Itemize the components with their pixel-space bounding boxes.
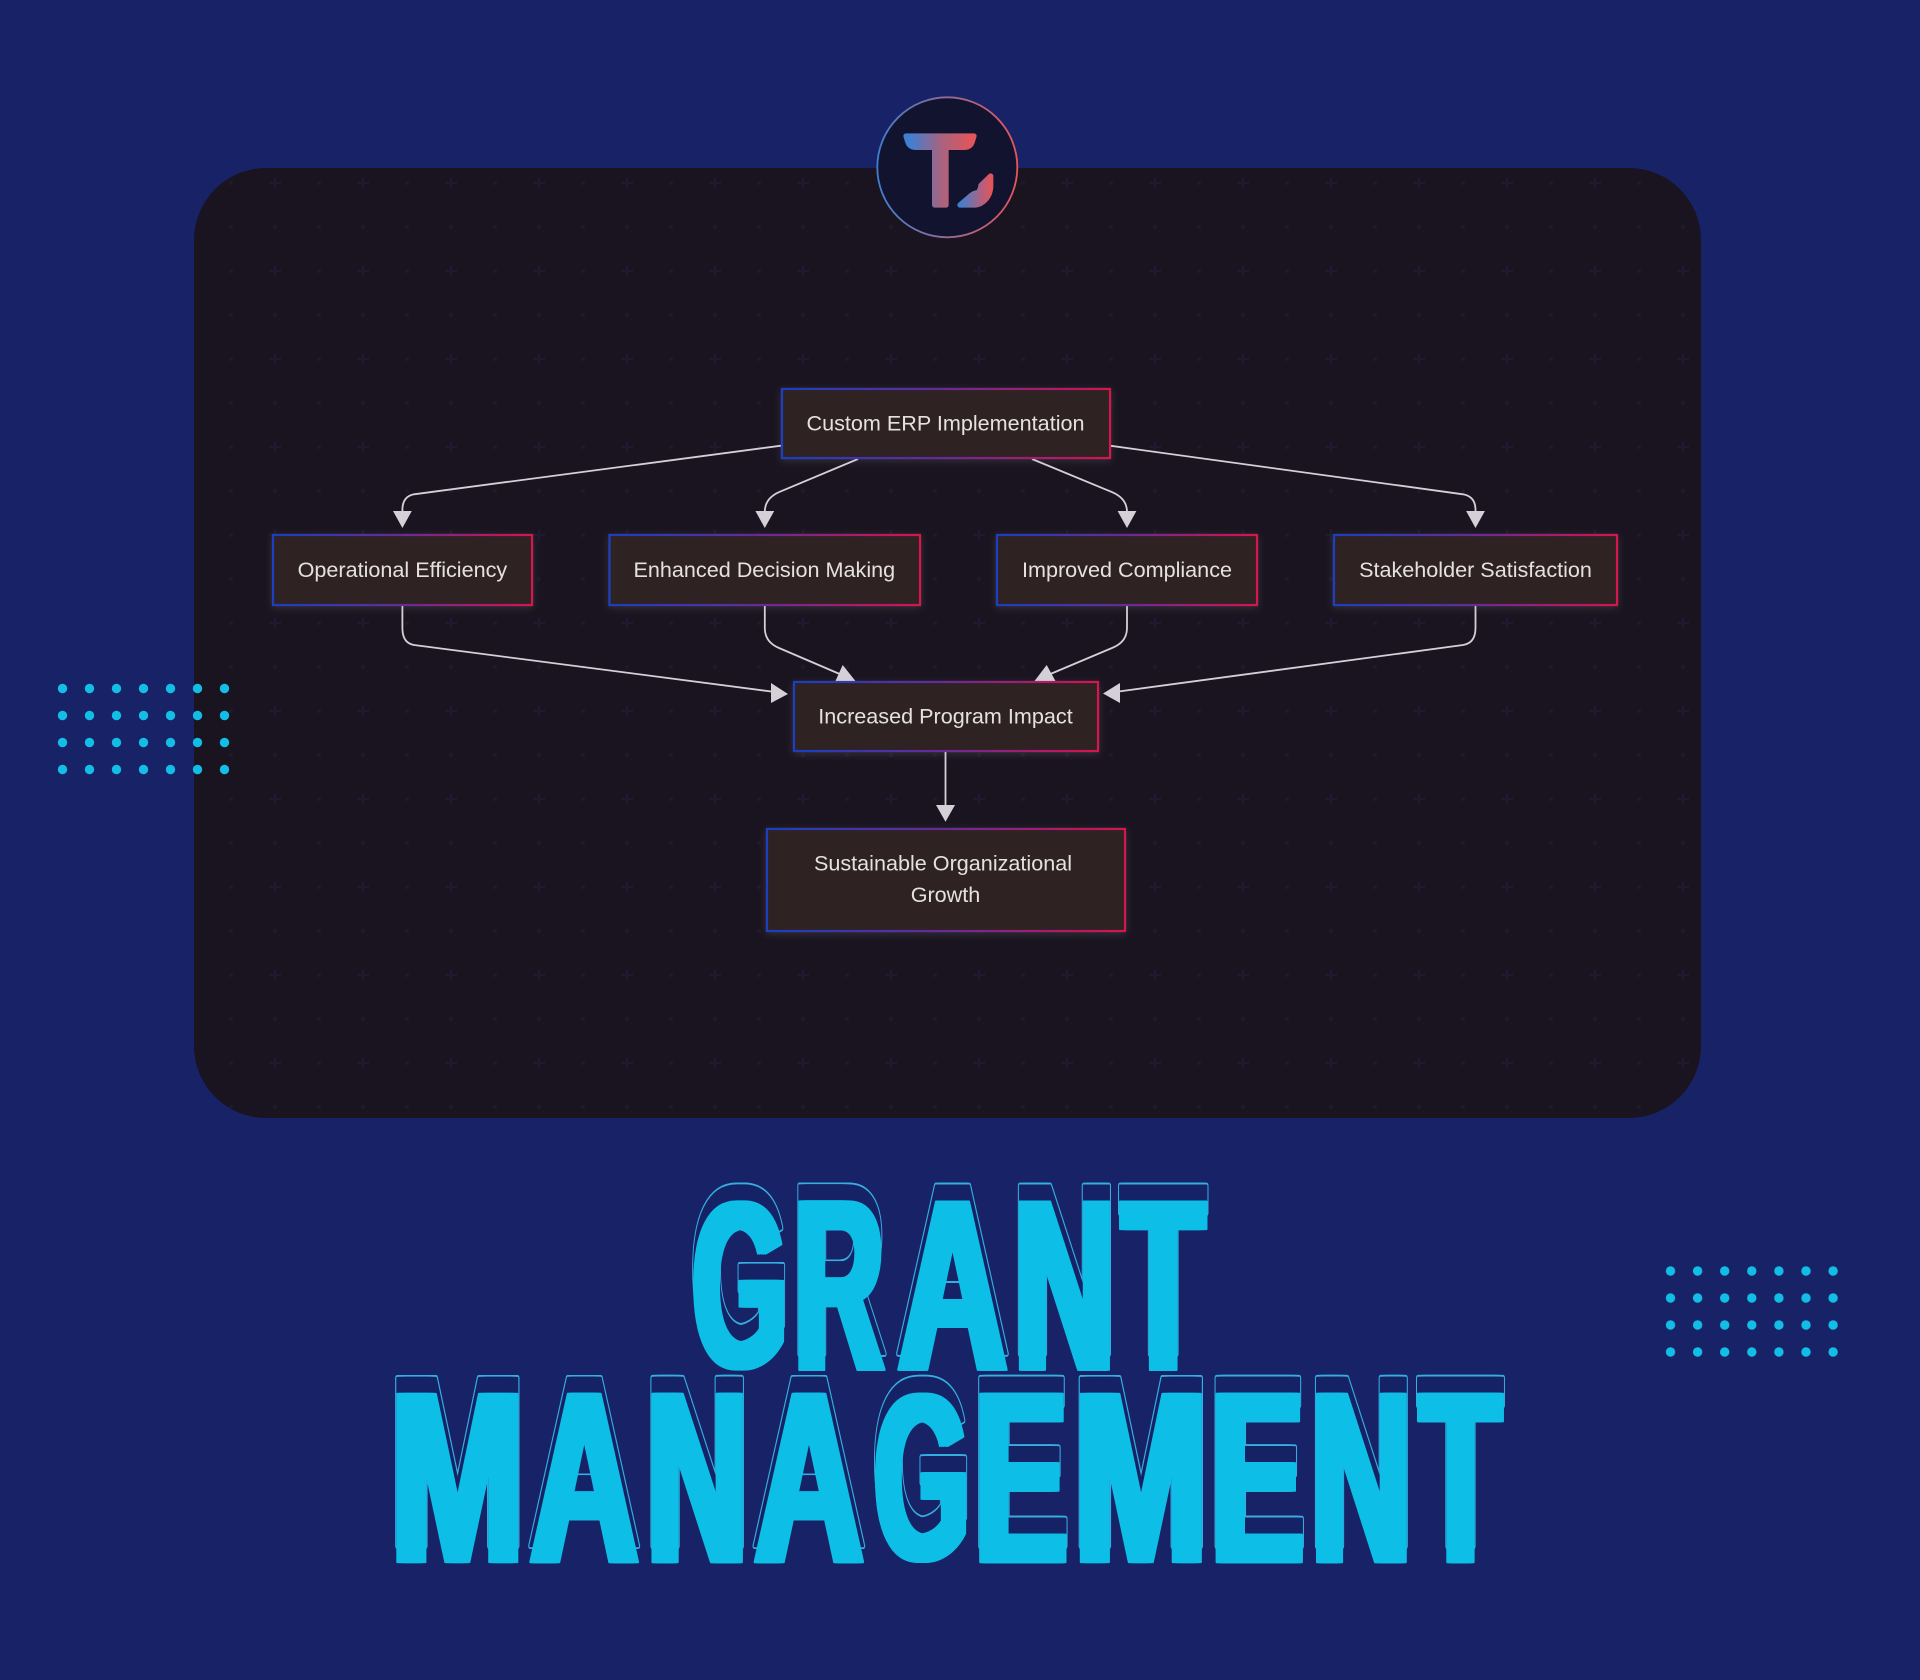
- node: Custom ERP Implementation: Custom ERP Implementation: [806, 410, 1085, 436]
- title: GRANT MANAGEMENT: N: [647, 1326, 748, 1599]
- title: GRANT MANAGEMENT: R: [795, 1133, 884, 1405]
- title: GRANT MANAGEMENT: T: [1122, 1133, 1204, 1406]
- title: GRANT MANAGEMENT: M: [390, 1325, 524, 1598]
- node: Improved Compliance: Improved Compliance: [1022, 557, 1232, 582]
- title: GRANT MANAGEMENT: A: [898, 1148, 1007, 1421]
- dot grid: left: [49, 675, 238, 783]
- title: GRANT MANAGEMENT: M: [1074, 1325, 1208, 1598]
- node: Improved Compliance: [997, 535, 1257, 605]
- title: GRANT MANAGEMENT: G: [693, 1137, 787, 1401]
- dot grid: right: [1657, 1258, 1847, 1366]
- title: GRANT MANAGEMENT: T: [1420, 1340, 1501, 1614]
- node: Enhanced Decision Making: Enhanced Decision Making: [633, 557, 895, 582]
- arrow: Operational Efficiency to Program Impact: [402, 605, 788, 703]
- title: GRANT MANAGEMENT: T: [1122, 1149, 1204, 1422]
- title: GRANT MANAGEMENT: N: [1014, 1134, 1115, 1407]
- title: GRANT MANAGEMENT: A: [530, 1341, 638, 1614]
- node: Stakeholder Satisfaction: [1334, 535, 1617, 605]
- arrow: Stakeholder Satisfaction to Program Impact: [1103, 605, 1476, 703]
- node: Enhanced Decision Making: [610, 535, 920, 605]
- title: GRANT MANAGEMENT: [390, 1132, 1501, 1615]
- title: GRANT MANAGEMENT: E: [975, 1342, 1067, 1615]
- title: GRANT MANAGEMENT: A: [755, 1341, 863, 1614]
- title: GRANT MANAGEMENT: N: [1014, 1150, 1115, 1423]
- title: GRANT MANAGEMENT: E: [1211, 1342, 1304, 1615]
- title: GRANT MANAGEMENT: M: [1074, 1325, 1208, 1598]
- arrow: Enhanced Decision Making to Program Impact: [765, 605, 857, 683]
- title: GRANT MANAGEMENT: A: [898, 1132, 1007, 1405]
- title: GRANT MANAGEMENT: A: [898, 1132, 1007, 1405]
- title: GRANT MANAGEMENT: T: [1420, 1324, 1501, 1598]
- title: GRANT MANAGEMENT: G: [875, 1329, 969, 1594]
- title: GRANT MANAGEMENT: E: [975, 1326, 1067, 1599]
- title: GRANT MANAGEMENT: A: [755, 1325, 863, 1598]
- node: Increased Program Impact: [794, 682, 1098, 751]
- node: Increased Program Impact: Increased Program Impact: [818, 704, 1073, 728]
- node: Sustainable Organizational Growth: Sustainable Organizational: [814, 850, 1072, 876]
- arrow: ERP to Operational Efficiency: [393, 446, 781, 528]
- title: GRANT MANAGEMENT: A: [530, 1325, 638, 1598]
- title: GRANT MANAGEMENT: T: [1420, 1324, 1501, 1598]
- panel: flowchart card: [194, 168, 1701, 1118]
- title: GRANT MANAGEMENT: R: [795, 1133, 884, 1405]
- title: GRANT MANAGEMENT: R: [795, 1149, 884, 1421]
- title: GRANT MANAGEMENT: G: [693, 1153, 787, 1417]
- node: Sustainable Organizational Growth: Growth: [911, 882, 980, 907]
- title: GRANT MANAGEMENT: N: [1014, 1134, 1115, 1407]
- icon: logo badge: [877, 97, 1017, 237]
- arrow: ERP to Stakeholder Satisfaction: [1110, 446, 1485, 528]
- title: GRANT MANAGEMENT: N: [1311, 1342, 1411, 1615]
- title: GRANT MANAGEMENT: M: [390, 1325, 524, 1598]
- arrow: Improved Compliance to Program Impact: [1033, 605, 1127, 683]
- title: GRANT MANAGEMENT: N: [1311, 1326, 1411, 1599]
- title: GRANT MANAGEMENT: G: [875, 1345, 969, 1610]
- title: GRANT MANAGEMENT: T: [1122, 1133, 1204, 1406]
- node: Operational Efficiency: Operational Efficiency: [298, 557, 507, 582]
- title: GRANT MANAGEMENT: N: [1311, 1326, 1411, 1599]
- arrow: ERP to Enhanced Decision Making: [755, 459, 858, 528]
- title: GRANT MANAGEMENT: G: [693, 1137, 787, 1401]
- title: GRANT MANAGEMENT: A: [755, 1325, 863, 1598]
- node: Sustainable Organizational Growth: [767, 829, 1125, 931]
- node: Stakeholder Satisfaction: Stakeholder Satisfaction: [1359, 557, 1592, 582]
- title: GRANT MANAGEMENT: E: [1211, 1326, 1304, 1599]
- title: GRANT MANAGEMENT: M: [390, 1341, 524, 1614]
- node: Operational Efficiency: [273, 535, 532, 605]
- title: GRANT MANAGEMENT: E: [1211, 1326, 1304, 1599]
- title: GRANT MANAGEMENT: G: [875, 1329, 969, 1594]
- title: GRANT MANAGEMENT: M: [1074, 1341, 1208, 1614]
- arrow: Program Impact to Sustainable Growth: [936, 751, 955, 822]
- title: GRANT MANAGEMENT: N: [647, 1326, 748, 1599]
- title: GRANT MANAGEMENT: A: [530, 1325, 638, 1598]
- arrow: ERP to Improved Compliance: [1032, 459, 1136, 528]
- title: GRANT MANAGEMENT: N: [647, 1342, 748, 1615]
- title: GRANT MANAGEMENT: E: [975, 1326, 1067, 1599]
- node: Custom ERP Implementation: [782, 389, 1110, 458]
